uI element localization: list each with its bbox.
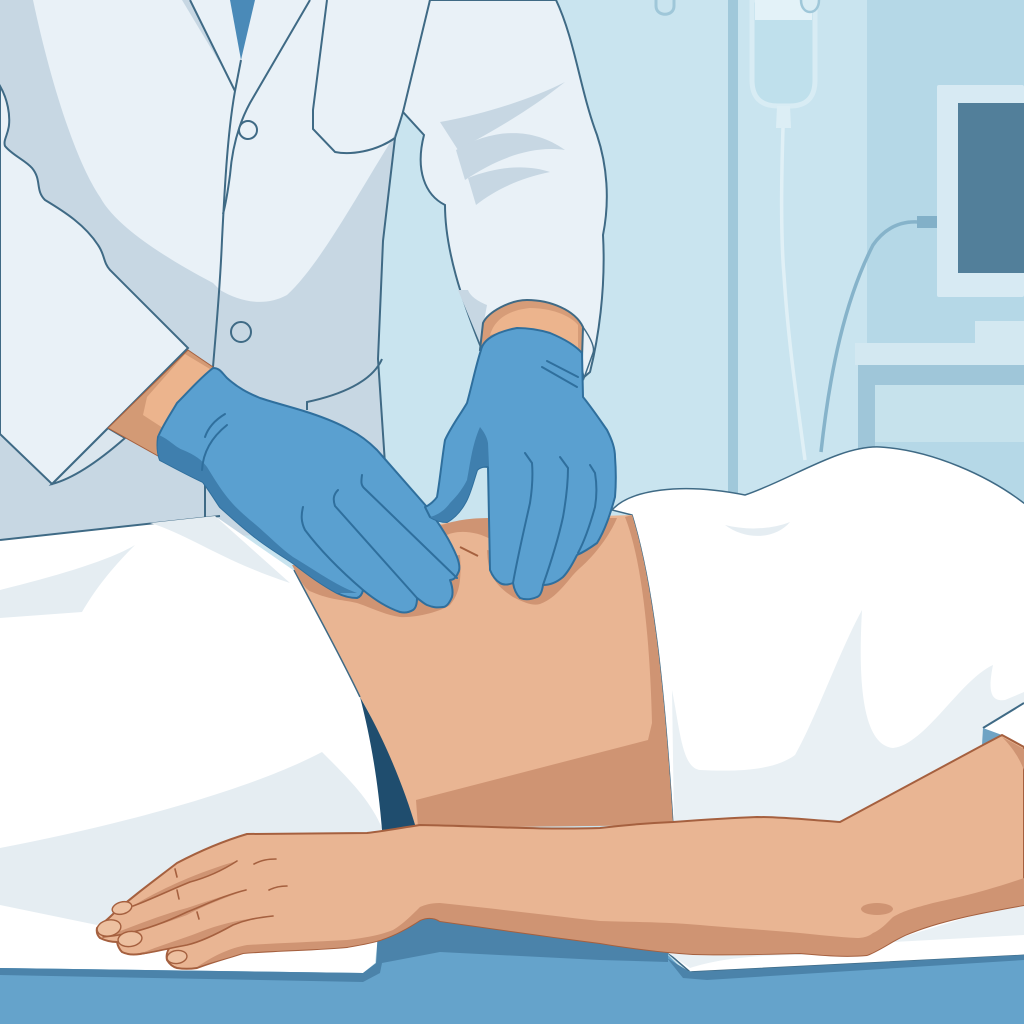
icon: monitor: [821, 85, 1024, 452]
icon: right blue glove: [425, 328, 616, 599]
icon: left wrist: [108, 350, 213, 456]
shadow under left glove: [292, 555, 461, 617]
left sleeve cuff fold: [52, 428, 125, 484]
icon: IV bag and tube: [752, 0, 819, 460]
icon: bedside cart: [855, 343, 1024, 465]
lit area of coat: [33, 0, 430, 302]
finger lines: [103, 859, 287, 954]
coat torso: [0, 0, 430, 545]
shadow near navel: [436, 518, 492, 540]
tie: [230, 0, 255, 60]
fingernails: [96, 900, 188, 965]
panel: white sheet under the left side: [0, 516, 382, 973]
left sleeve: [0, 86, 188, 484]
icon: left blue glove: [157, 368, 459, 613]
forearm shading: [197, 878, 1024, 967]
coat seams: [190, 0, 430, 517]
dark gap under torso: [360, 697, 418, 830]
torso shadow: [416, 515, 673, 828]
finger shading: [133, 861, 237, 906]
icon: patient's arm and hand: [96, 735, 1024, 969]
thumb shading: [430, 427, 489, 522]
right sleeve: [403, 0, 607, 378]
panel: clinician's white coat: [0, 0, 607, 545]
panel: white sheet over the right side: [612, 447, 1024, 972]
skin: [294, 515, 673, 828]
upper coat button: [239, 121, 257, 139]
panel: exposed abdomen: [292, 515, 673, 830]
panel: blue exam table: [0, 905, 1024, 1024]
glove shading: [158, 435, 357, 593]
shadow under right glove: [487, 518, 617, 605]
sleeve folds: [440, 82, 565, 150]
icon: right wrist: [480, 300, 594, 378]
lower coat button: [231, 322, 251, 342]
